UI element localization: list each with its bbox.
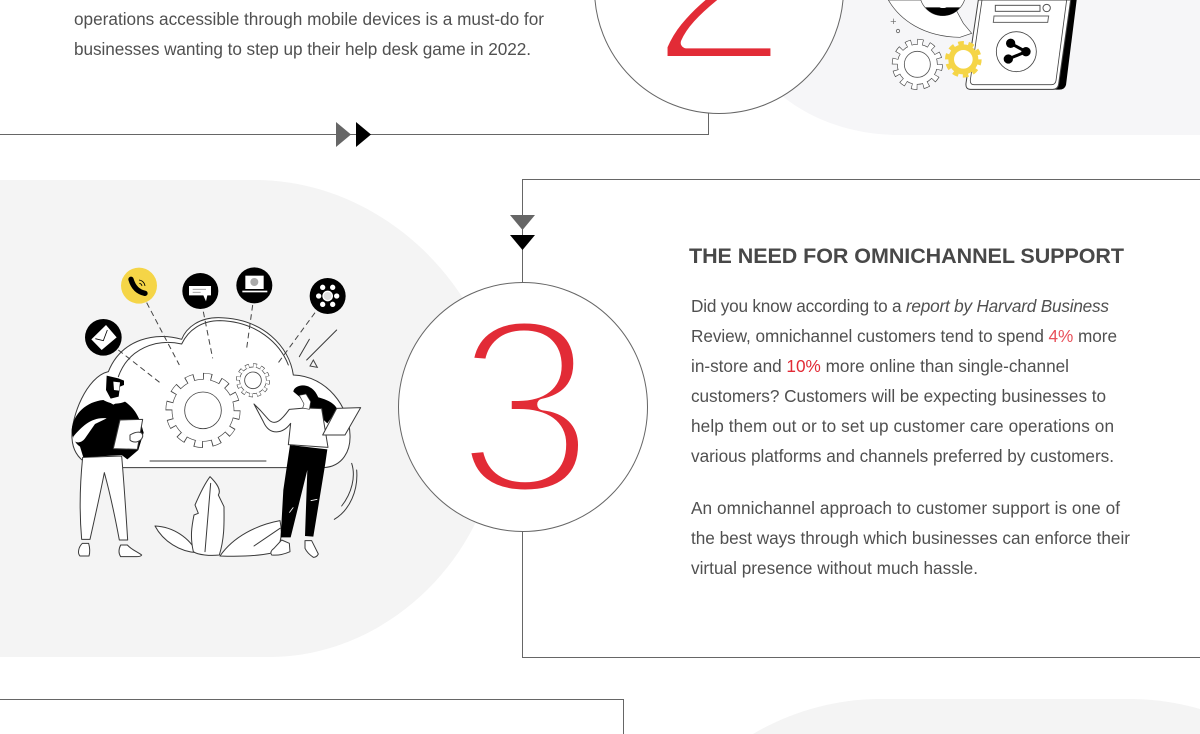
dot — [1043, 4, 1050, 12]
text block: paragraph one: help them out or to set up customer care operations on — [691, 416, 1114, 436]
text block: paragraph two: An omnichannel approach to customer support is one of — [691, 498, 1120, 518]
sparkle — [891, 19, 896, 24]
shoes — [271, 540, 290, 555]
white speech circle — [888, 0, 972, 37]
number circle: 3 — [398, 266, 648, 546]
tablet — [323, 408, 361, 435]
phone body — [966, 0, 1077, 90]
background blob: bottom right — [753, 699, 1200, 734]
connector frame: step 2 — [0, 113, 708, 134]
neck — [107, 392, 119, 405]
text pill two — [993, 16, 1049, 22]
text block: step 2 closing lines — [74, 9, 544, 59]
small gear — [238, 366, 268, 395]
head — [106, 376, 124, 399]
icon: network — [310, 278, 346, 314]
pointing arm — [73, 418, 107, 442]
text block: paragraph one: Review, omnichannel customers tend to spend 4% more — [691, 326, 1117, 346]
text block: paragraph one — [691, 296, 1117, 466]
plant leaves — [155, 477, 281, 556]
phone face — [966, 0, 1071, 89]
avatar ring — [920, 0, 966, 16]
connector frame: step 4 — [0, 700, 624, 734]
person: man with tablet — [72, 376, 144, 557]
text block: paragraph two: virtual presence without much hassle. — [691, 558, 978, 578]
dashed connector lines — [118, 303, 315, 384]
text block: paragraph one: customers? Customers will be expecting businesses to — [691, 386, 1106, 406]
text pill one — [995, 5, 1040, 11]
hair — [293, 385, 337, 423]
small ring — [896, 29, 900, 33]
face — [113, 382, 120, 391]
person: woman with tablet — [254, 385, 361, 557]
avatar shoulders — [925, 7, 960, 16]
icon: laptop — [236, 267, 272, 303]
icon: phone call — [121, 268, 157, 304]
hand — [130, 432, 143, 442]
text block: paragraph one: various platforms and channels preferred by customers. — [691, 446, 1114, 466]
background blob: left — [0, 180, 500, 657]
text block: paragraph two: the best ways through which businesses can enforce their — [691, 528, 1130, 548]
trousers — [80, 456, 128, 540]
text block: paragraph one: Did you know according to a report by Harvard Business — [691, 296, 1109, 316]
trouser highlights — [289, 499, 317, 513]
tablet — [113, 419, 143, 449]
number circle: 2 — [594, 0, 844, 114]
shoes — [79, 543, 90, 556]
arrow: double down — [510, 215, 535, 250]
large gear — [169, 377, 237, 444]
motion lines — [299, 330, 357, 519]
torso — [72, 400, 144, 459]
phone inner line — [970, 0, 1067, 85]
text block: paragraph two — [691, 498, 1130, 578]
icon: envelope — [85, 319, 122, 356]
background blob: top right — [760, 0, 1200, 135]
shirt and arm — [254, 404, 328, 447]
avatar neck — [938, 0, 948, 8]
cloud — [72, 318, 350, 468]
face — [299, 394, 311, 409]
connector frame: step 3 — [522, 180, 1200, 658]
icon: chat bubble — [182, 273, 218, 309]
number circle: 3: 3 — [455, 266, 595, 546]
outlined gear — [896, 43, 939, 86]
heading: the need for omnichannel support: THE NEED FOR OMNICHANNEL SUPPORT — [689, 244, 1124, 268]
text block: paragraph one: in-store and 10% more online than single-channel — [691, 356, 1069, 376]
arrow: double right — [336, 122, 371, 147]
share icon — [996, 32, 1036, 72]
yellow gear — [948, 44, 979, 75]
illustration: cloud with support channels and two people — [72, 267, 361, 557]
text block: step 2 closing lines: businesses wanting to step up their help desk game in 2022. — [74, 39, 531, 59]
text block: step 2 closing lines: operations accessible through mobile devices is a must-do for — [74, 9, 544, 29]
trousers — [281, 445, 327, 537]
illustration: phone and gears, top right — [888, 0, 1077, 90]
